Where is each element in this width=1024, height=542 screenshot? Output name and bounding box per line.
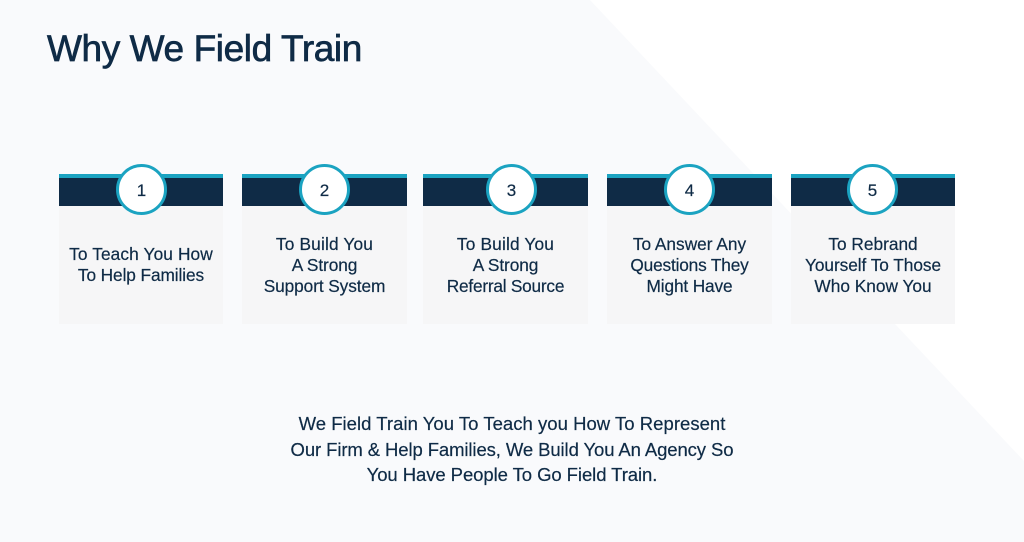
card 1 text: To Help Families — [78, 265, 204, 285]
closing statement: Our Firm & Help Families, We Build You An Agency So — [291, 439, 733, 460]
card 3 text — [447, 234, 564, 296]
card 2 number badge — [299, 164, 350, 215]
card 4 number badge — [664, 164, 715, 215]
closing statement: We Field Train You To Teach you How To Represent — [299, 413, 725, 434]
card 4 number badge: 4 — [685, 181, 694, 200]
card 4 text: To Answer Any — [633, 234, 746, 254]
card 1 — [59, 174, 223, 324]
card 1 text — [69, 244, 213, 285]
card 4 — [607, 174, 772, 324]
card 3 header bar — [423, 174, 588, 206]
card 5 text: To Rebrand — [828, 234, 918, 254]
card 4 text: Questions They — [630, 255, 749, 275]
card 4 text: Might Have — [647, 276, 732, 296]
card 2 text: A Strong — [292, 255, 357, 275]
card 5 — [791, 174, 955, 324]
card 4 header bar — [607, 174, 772, 206]
closing statement — [291, 413, 733, 486]
card 2 number badge: 2 — [320, 181, 329, 200]
card 2 text — [264, 234, 385, 296]
card 1 number badge: 1 — [137, 181, 146, 200]
card 3 text: A Strong — [473, 255, 538, 275]
card 1 header bar — [59, 174, 223, 206]
card 4 text — [630, 234, 749, 296]
card 2 header bar — [242, 174, 407, 206]
card 3 text: To Build You — [457, 234, 554, 254]
title: Why We Field Train — [47, 28, 362, 69]
card 5 text — [805, 234, 941, 296]
card 1 text: To Teach You How — [69, 244, 213, 264]
card 3 number badge: 3 — [507, 181, 516, 200]
card 3 — [423, 174, 588, 324]
closing statement: You Have People To Go Field Train. — [367, 464, 657, 485]
card 1 number badge — [116, 164, 167, 215]
card 5 text: Yourself To Those — [805, 255, 941, 275]
card 2 text: To Build You — [276, 234, 373, 254]
card 3 text: Referral Source — [447, 276, 564, 296]
card 5 header bar — [791, 174, 955, 206]
card 2 text: Support System — [264, 276, 385, 296]
card 3 number badge — [486, 164, 537, 215]
card 5 number badge — [847, 164, 898, 215]
card 5 number badge: 5 — [868, 181, 877, 200]
card 2 — [242, 174, 407, 324]
card 5 text: Who Know You — [814, 276, 932, 296]
